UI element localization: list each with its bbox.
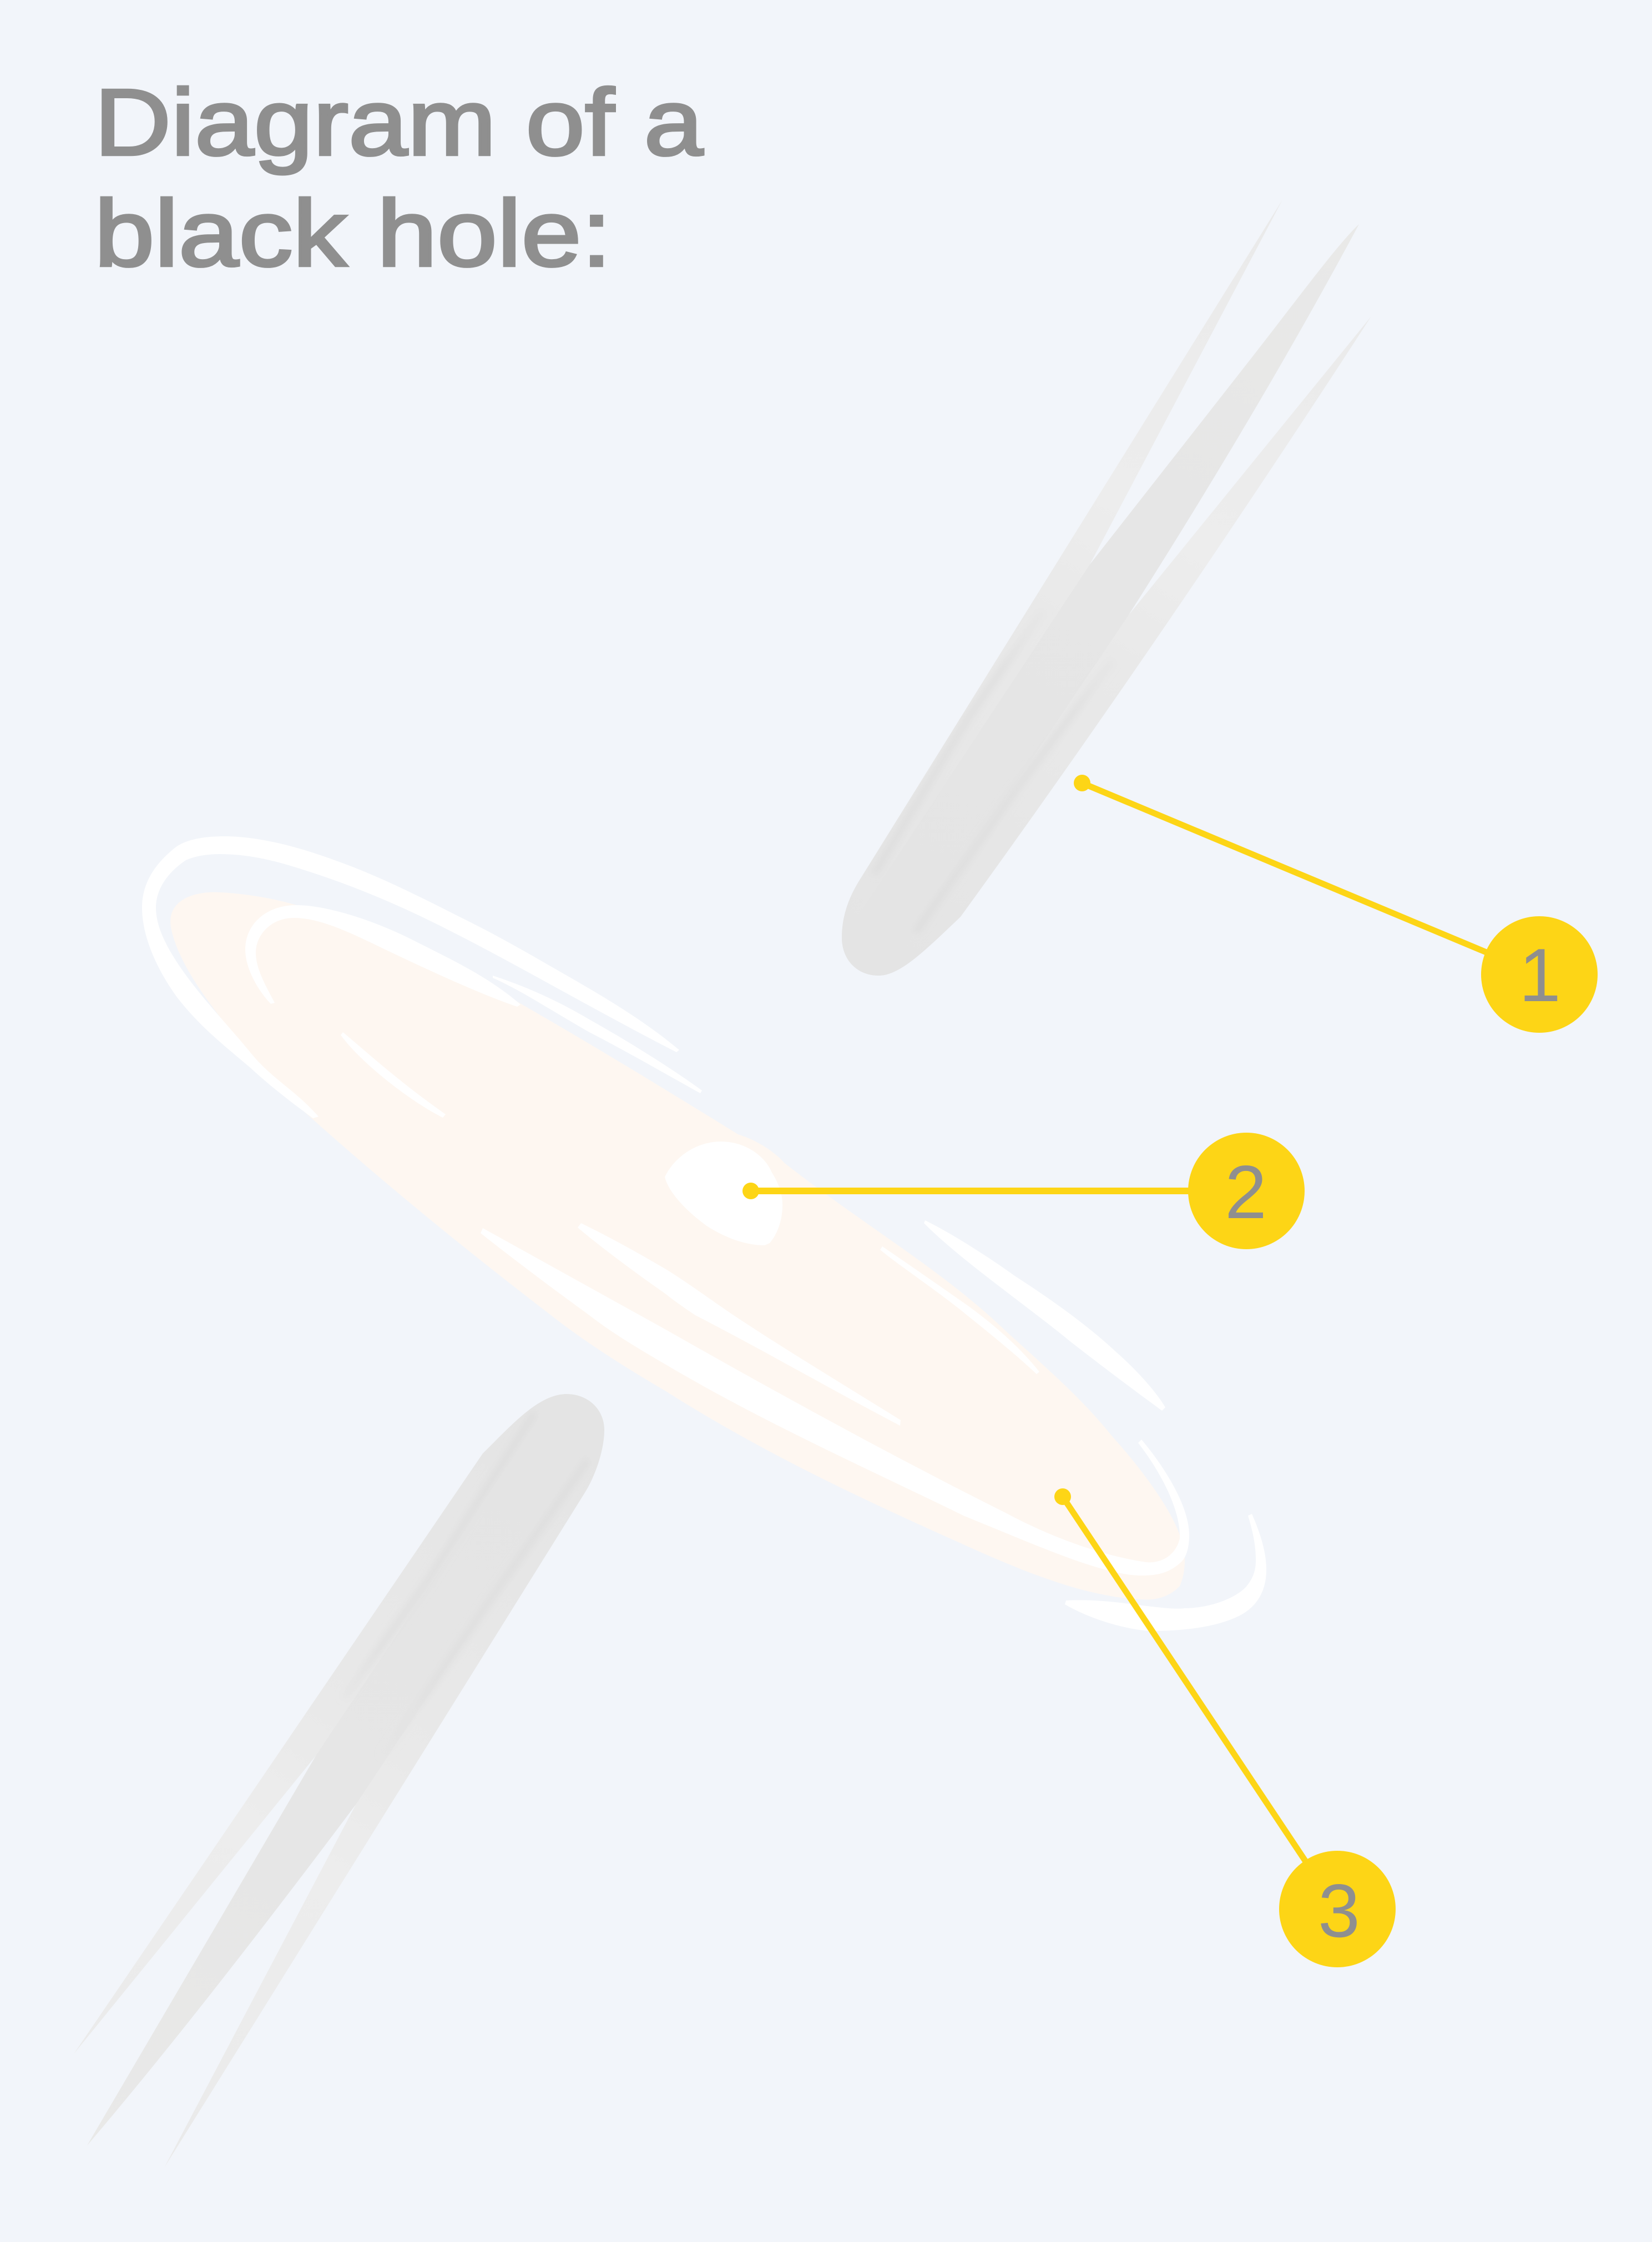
title: Diagram of a <box>94 70 704 175</box>
pointer line 1 <box>1074 775 1539 974</box>
lower jet <box>74 1394 604 2168</box>
long white streak with hook <box>481 1228 1189 1576</box>
accretion disk <box>170 892 1185 1600</box>
upper jet <box>842 200 1371 976</box>
streak: disk centre <box>578 1223 901 1426</box>
streak: disk upper left <box>341 1032 446 1118</box>
pointer line 3 <box>1054 1488 1337 1909</box>
number badge 2 <box>1188 1133 1305 1249</box>
streak: outside disk right <box>924 1220 1165 1411</box>
number badge 3: 3 <box>1318 1869 1360 1953</box>
number badge 1 <box>1481 916 1598 1033</box>
title <box>94 70 704 286</box>
title: black hole: <box>94 181 612 286</box>
streak: disk right <box>880 1246 1039 1374</box>
streak: above disk <box>493 976 702 1093</box>
central white core <box>665 1142 782 1245</box>
outer white swirl <box>142 836 679 1118</box>
bottom white swirl <box>1065 1514 1266 1631</box>
callout 1: upper jet <box>1074 775 1598 1033</box>
number badge 1: 1 <box>1519 933 1561 1017</box>
pointer line 2 <box>742 1183 1246 1199</box>
callout 2: event horizon <box>742 1133 1305 1249</box>
inner white swirl <box>245 905 521 1007</box>
callout 3: accretion disk <box>1054 1488 1396 1967</box>
number badge 2: 2 <box>1225 1150 1267 1234</box>
number badge 3 <box>1279 1851 1396 1967</box>
